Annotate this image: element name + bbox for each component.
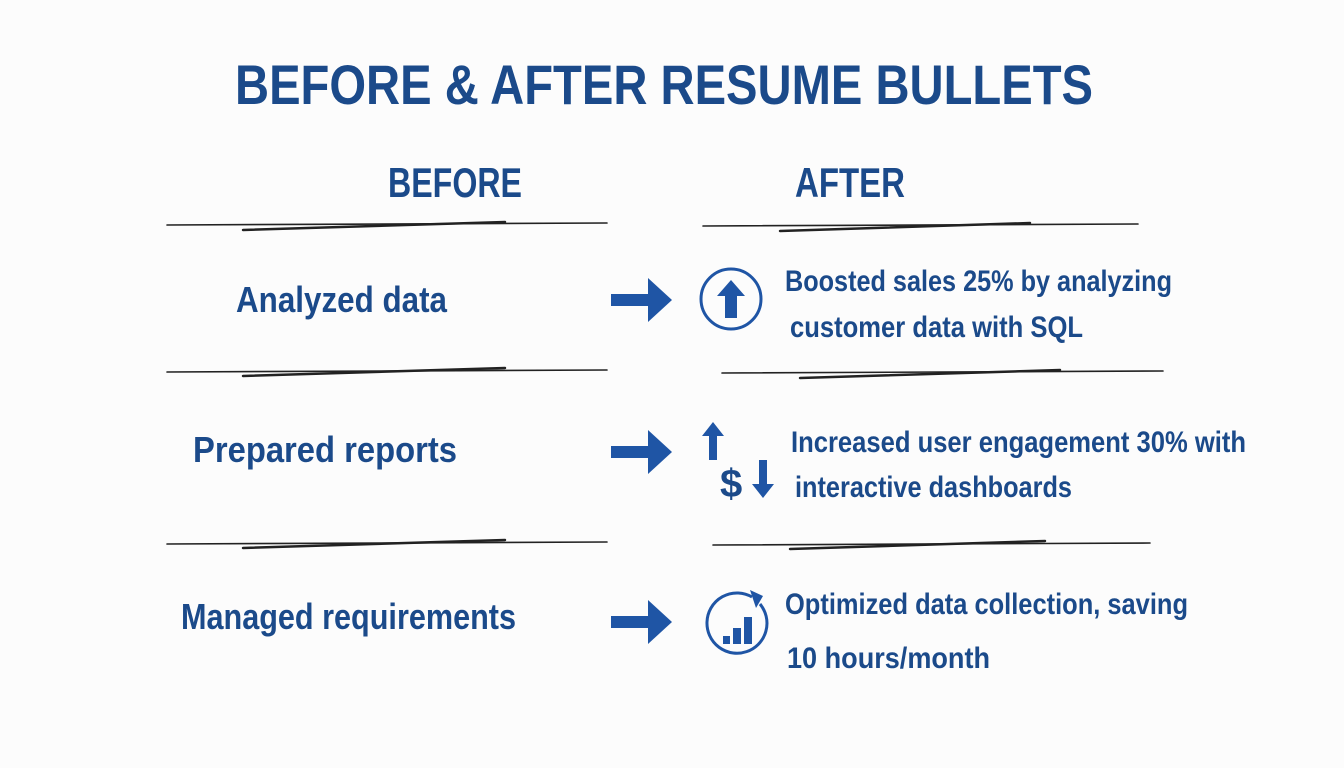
arrow 3 — [611, 600, 672, 644]
heading: before: BEFORE — [388, 159, 522, 206]
icon: up arrow in circle — [701, 269, 761, 329]
arrow 1 — [611, 278, 672, 322]
icon: dollar with up/down arrows — [702, 422, 774, 506]
row 1: after text: Boosted sales 25% by analyzing — [785, 265, 1172, 298]
icon: refresh with bar chart — [707, 590, 767, 653]
arrow 2 — [611, 430, 672, 474]
row 1: before text: Analyzed data — [236, 279, 448, 320]
row 2: before text: Prepared reports — [193, 429, 457, 470]
icon: dollar with up/down arrows: $ — [720, 462, 742, 506]
row 3: after text: Optimized data collection, saving — [785, 588, 1188, 621]
heading: after: AFTER — [795, 159, 905, 206]
row 2: after text — [791, 426, 1246, 504]
row 1: after text — [785, 265, 1172, 344]
row 3: before text: Managed requirements — [181, 596, 516, 637]
row 2: after text: interactive dashboards — [795, 471, 1072, 504]
row 3: after text: 10 hours/month — [787, 642, 990, 675]
row 2: after text: Increased user engagement 30% with — [791, 426, 1246, 459]
row 3: after text — [785, 588, 1188, 675]
row 1: after text: customer data with SQL — [790, 311, 1083, 344]
title: BEFORE & AFTER RESUME BULLETS — [235, 53, 1093, 116]
